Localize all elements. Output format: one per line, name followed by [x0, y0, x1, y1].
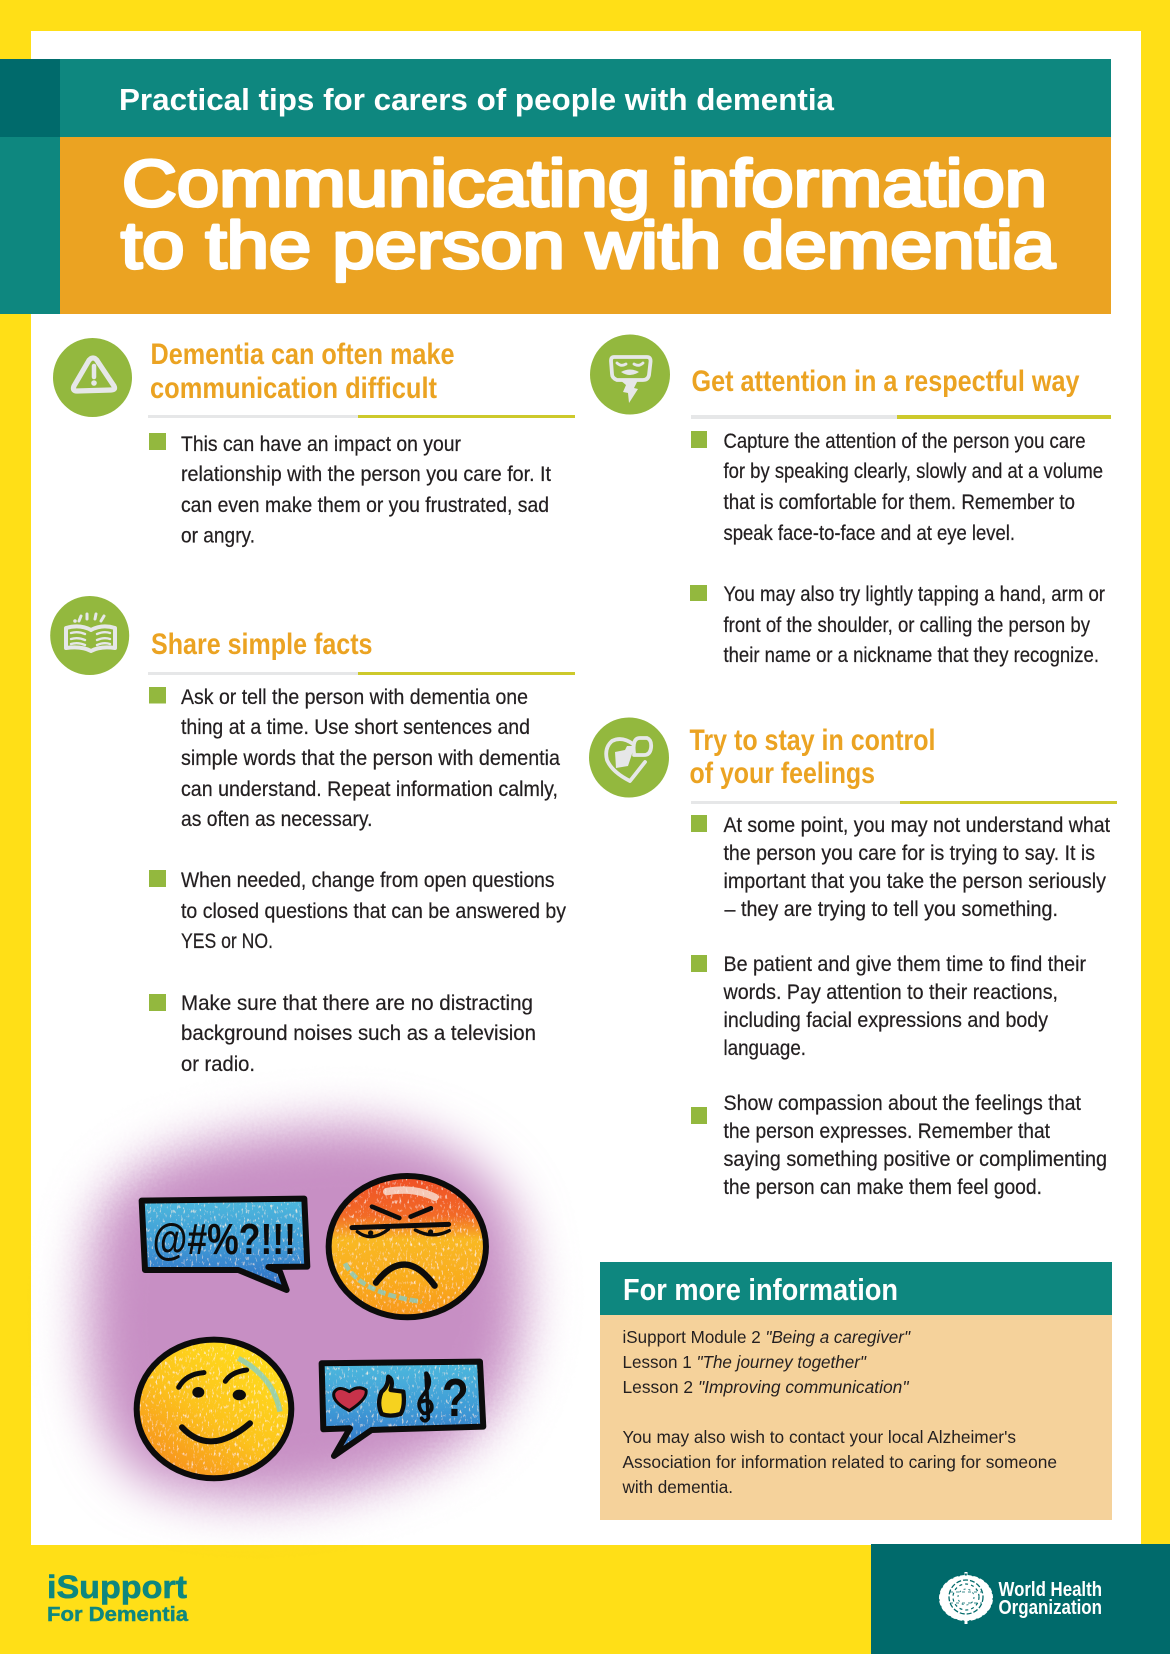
smiling face	[137, 1340, 291, 1478]
icon: talking head	[590, 334, 670, 414]
bullet marker	[691, 955, 707, 972]
heading: Dementia can often make	[150, 338, 454, 371]
text block	[181, 868, 566, 953]
text block: YES or NO.	[181, 929, 273, 953]
text block: can understand. Repeat information calmly,	[181, 777, 558, 801]
heading: Share simple facts	[151, 628, 372, 661]
icon: open book	[50, 596, 129, 675]
organisation name: Organization	[998, 1597, 1102, 1619]
text block: the person expresses. Remember that	[724, 1119, 1050, 1143]
icon: heart with thumb and bubble	[589, 718, 669, 798]
text block: or angry.	[181, 524, 255, 548]
text block	[181, 432, 551, 548]
text block	[724, 429, 1103, 545]
title	[121, 146, 1055, 282]
icon: warning triangle	[53, 338, 132, 417]
text block: lessons: Lesson 2 "Improving communication"	[622, 1377, 909, 1397]
subtitle: Practical tips for carers of people with dementia	[119, 82, 835, 117]
text block: or radio.	[181, 1052, 255, 1076]
bullet marker	[149, 870, 166, 887]
heading: Try to stay in control	[690, 724, 936, 757]
text block: contact: You may also wish to contact your local Alzheimer's	[622, 1427, 1016, 1447]
header banner	[0, 59, 1111, 314]
text block: contact: Association for information related to caring for someone	[622, 1452, 1057, 1472]
text block: This can have an impact on your	[181, 432, 461, 456]
bullet marker	[149, 994, 166, 1011]
text block	[724, 813, 1110, 921]
text block: words. Pay attention to their reactions,	[723, 980, 1058, 1004]
logo: iSupport For Dementia: iSupport	[47, 1569, 187, 1605]
text block: Be patient and give them time to find their	[724, 952, 1086, 976]
footer panel: World Health Organization	[871, 1544, 1170, 1654]
logo: WHO emblem	[938, 1572, 994, 1624]
panel: for more information	[600, 1262, 1112, 1520]
text block	[181, 991, 536, 1076]
text block: relationship with the person you care for. It	[181, 462, 551, 486]
panel: try to stay in control of your feelings	[589, 718, 1117, 1199]
title: to the person with dementia	[121, 208, 1055, 282]
text block: You may also try lightly tapping a hand, arm or	[724, 582, 1105, 606]
text block: When needed, change from open questions	[181, 868, 554, 892]
text block: Ask or tell the person with dementia one	[181, 685, 528, 709]
heading: of your feelings	[690, 757, 875, 790]
heading: For more information	[623, 1272, 898, 1307]
bullet marker	[149, 687, 166, 704]
heading: communication difficult	[150, 372, 437, 405]
text block: the person can make them feel good.	[724, 1175, 1042, 1199]
text block: their name or a nickname that they recognize.	[724, 643, 1099, 667]
heading	[690, 724, 936, 790]
speech bubble: heart, thumb, clef, question: ?	[442, 1369, 469, 1428]
text block: important that you take the person seriously	[724, 869, 1106, 893]
text block: simple words that the person with dementia	[181, 746, 560, 770]
text block	[723, 952, 1086, 1060]
panel: dementia can make communication difficult	[53, 338, 575, 548]
text block: At some point, you may not understand what	[724, 813, 1110, 837]
text block: lessons: iSupport Module 2 "Being a caregiver"	[622, 1327, 911, 1347]
speech bubble: symbols	[142, 1199, 307, 1290]
text block: Show compassion about the feelings that	[724, 1091, 1081, 1115]
text block: background noises such as a television	[181, 1021, 536, 1045]
bullet marker	[149, 433, 166, 450]
logo: iSupport For Dementia	[47, 1569, 189, 1626]
text block: – they are trying to tell you something.	[724, 897, 1058, 921]
heading	[150, 338, 454, 405]
text block: speak face-to-face and at eye level.	[724, 521, 1015, 545]
text block: saying something positive or complimenting	[724, 1147, 1107, 1171]
text block: including facial expressions and body	[724, 1008, 1048, 1032]
text block: lessons	[622, 1327, 911, 1397]
speech bubble: symbols: @#%?!!!	[153, 1216, 296, 1264]
text block: language.	[724, 1036, 806, 1060]
text block: as often as necessary.	[181, 807, 372, 831]
organisation name: World Health	[998, 1579, 1102, 1601]
bullet marker	[691, 1107, 707, 1124]
text block: lessons: Lesson 1 "The journey together"	[622, 1352, 867, 1372]
text block: contact	[622, 1427, 1057, 1497]
text block: can even make them or you frustrated, sad	[181, 493, 549, 517]
text block: front of the shoulder, or calling the person by	[724, 613, 1090, 637]
organisation name	[998, 1579, 1102, 1619]
panel: share simple facts	[50, 596, 575, 1076]
bullet marker	[691, 431, 707, 448]
text block: Make sure that there are no distracting	[181, 991, 533, 1015]
panel: get attention in a respectful way	[590, 334, 1111, 667]
logo: iSupport For Dementia: For Dementia	[47, 1604, 189, 1626]
text block: the person you care for is trying to say. It is	[724, 841, 1095, 865]
text block: that is comfortable for them. Remember to	[724, 490, 1075, 514]
text block: for by speaking clearly, slowly and at a volume	[724, 459, 1103, 483]
illustration: emotions and speech bubbles	[87, 1126, 524, 1498]
bullet marker	[691, 815, 707, 832]
heading: Get attention in a respectful way	[692, 365, 1080, 398]
text block: to closed questions that can be answered by	[181, 899, 566, 923]
text block: Capture the attention of the person you care	[724, 429, 1086, 453]
text block	[724, 582, 1105, 667]
speech bubble: heart, thumb, clef, question	[322, 1362, 483, 1456]
angry face	[329, 1176, 486, 1317]
text block: contact: with dementia.	[622, 1477, 733, 1497]
text block	[724, 1091, 1107, 1199]
text block	[181, 685, 560, 831]
text block: thing at a time. Use short sentences and	[181, 715, 530, 739]
bullet marker	[690, 585, 707, 601]
title: Communicating information	[122, 146, 1047, 220]
